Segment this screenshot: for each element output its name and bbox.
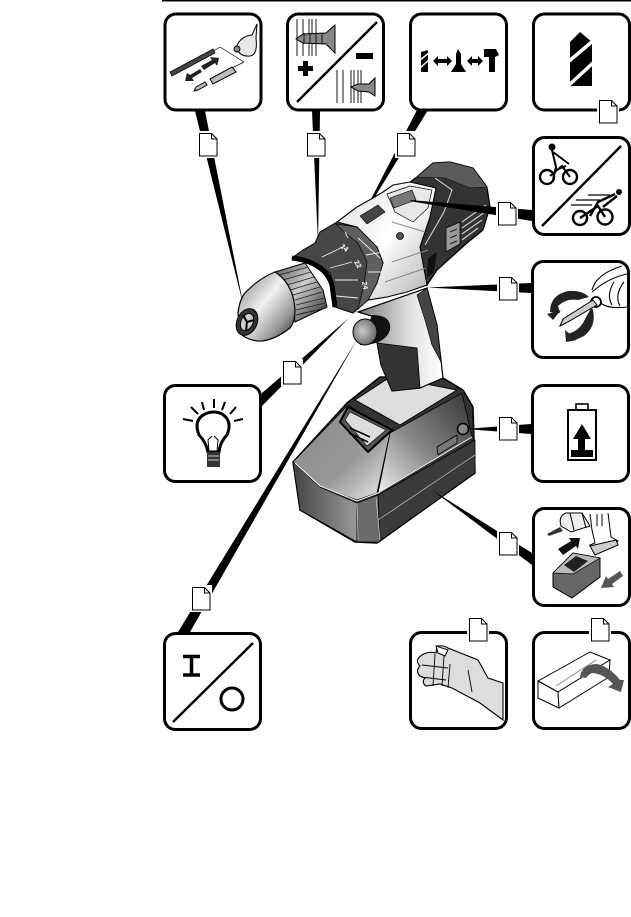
torque and gear rings: 22 — [352, 260, 362, 270]
panel: hand protection — [410, 632, 506, 728]
leader: work light — [262, 318, 349, 406]
panel: rotation direction — [532, 262, 628, 358]
panel: speed selector — [534, 138, 630, 234]
leader: mode selector — [356, 110, 428, 228]
figure tag: hand protection — [467, 616, 489, 643]
leader: on off switch — [178, 338, 358, 632]
figure tag: mode selector — [395, 131, 417, 158]
figure tag: speed selector — [496, 200, 518, 227]
figure tag: work light — [281, 359, 303, 386]
top rule — [162, 0, 631, 2]
handle — [358, 288, 443, 391]
panel: screw depth — [288, 14, 384, 110]
panel: on off switch — [164, 634, 260, 730]
battery pack — [293, 377, 475, 543]
panel: storage case — [534, 632, 630, 728]
torque and gear rings — [292, 222, 384, 313]
chuck — [232, 263, 327, 341]
figure tag: battery removal — [497, 530, 519, 557]
figure tag: drill bit — [597, 98, 619, 125]
leader: speed selector — [410, 200, 532, 221]
leader: rotation direction — [427, 283, 531, 293]
leader: torque — [312, 111, 320, 243]
figure tag: bit change — [197, 131, 219, 158]
panel: mode selector — [410, 14, 506, 110]
trigger — [353, 315, 390, 345]
power drill — [232, 162, 490, 543]
figure tag: rotation direction — [497, 275, 519, 302]
torque and gear rings: 14 — [339, 243, 349, 254]
panel: battery removal — [534, 508, 630, 606]
panel: work light — [164, 386, 260, 482]
figure tag: on off switch — [190, 585, 212, 612]
leader: battery charge — [465, 424, 531, 434]
rear motor housing — [410, 162, 490, 285]
leader: battery removal — [432, 490, 532, 565]
figure tag: battery charge — [497, 415, 519, 442]
figure tag: storage case — [589, 616, 611, 643]
panel: battery charge — [532, 386, 628, 482]
torque and gear rings: 24 — [360, 281, 368, 290]
panel: bit change — [165, 14, 261, 110]
leader: bit change — [195, 111, 244, 308]
figure tag: torque — [305, 131, 327, 158]
panel: drill bit — [534, 14, 630, 110]
main body — [337, 182, 436, 300]
